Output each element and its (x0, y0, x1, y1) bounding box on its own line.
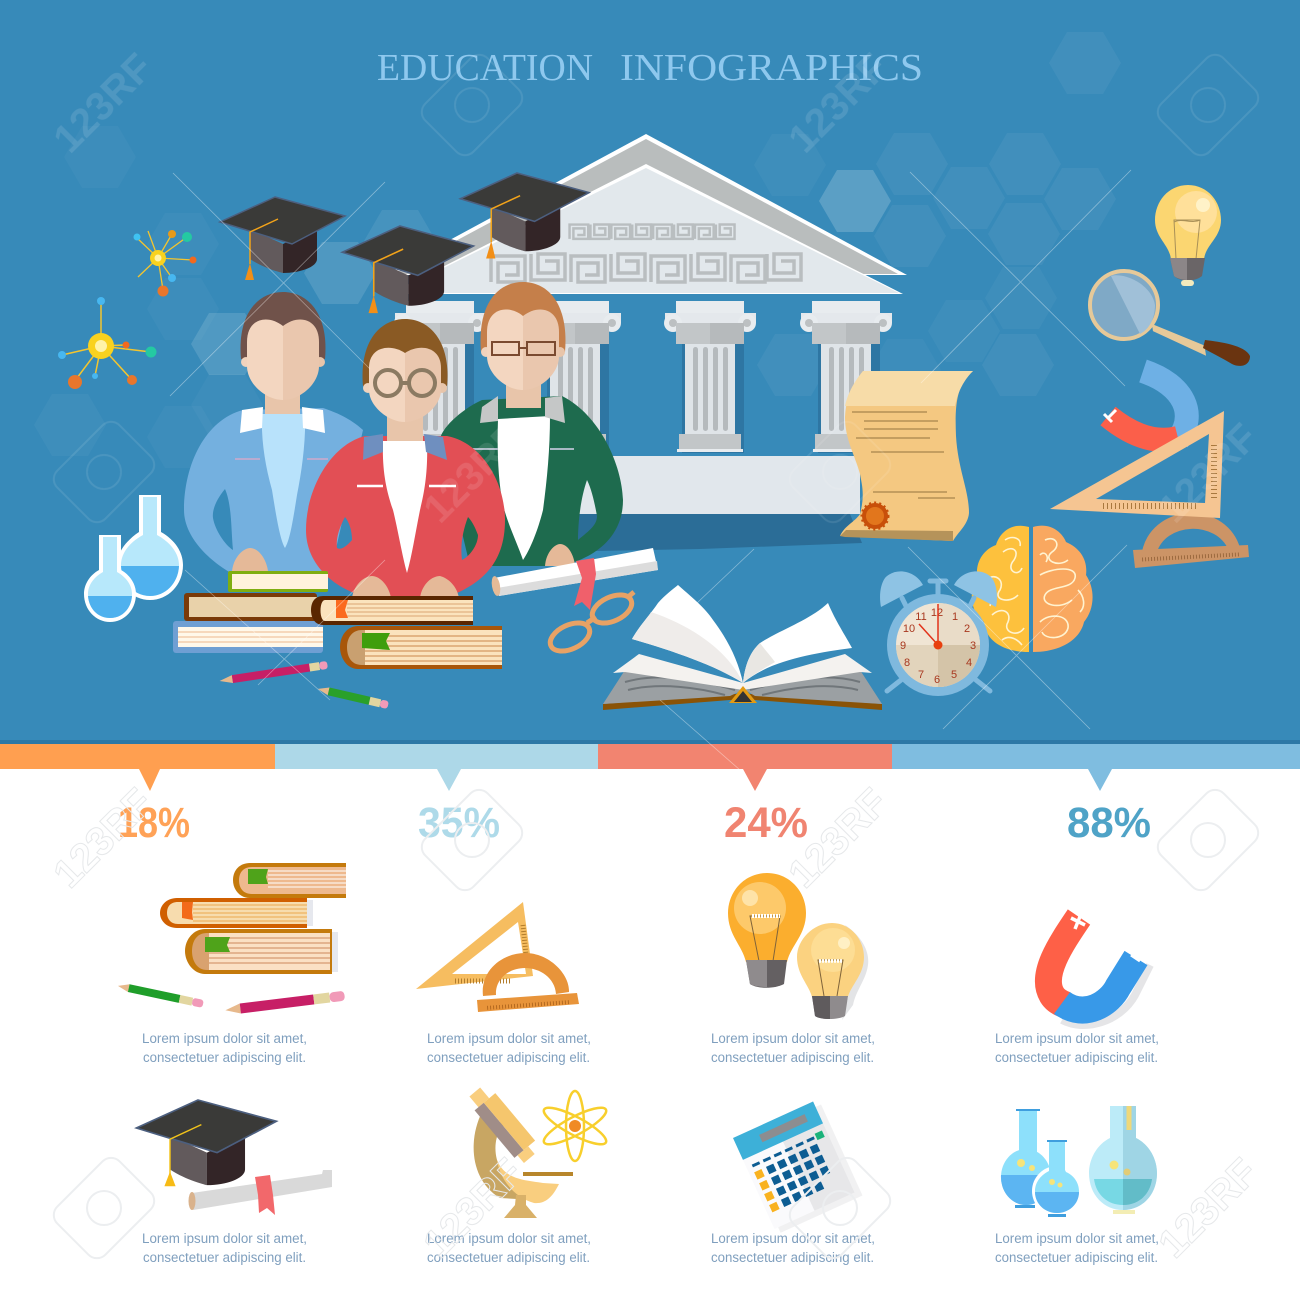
clock body (887, 594, 989, 696)
brown book (184, 593, 317, 621)
tube (466, 1082, 542, 1166)
clock numbers: 1 (952, 611, 958, 623)
base (504, 1195, 537, 1218)
collar (363, 434, 447, 460)
green book (228, 571, 328, 592)
ribbon (574, 558, 596, 610)
clock numbers: 2 (964, 623, 970, 635)
head (241, 292, 325, 400)
eighth lorem text (995, 1231, 1159, 1265)
stage (523, 1172, 573, 1176)
cap (136, 1100, 276, 1186)
jacket (440, 396, 623, 566)
second lorem text (427, 1031, 591, 1065)
collar (240, 407, 325, 433)
bells (880, 571, 997, 607)
fists (352, 576, 459, 598)
icon: large molecule (58, 297, 156, 389)
icon: small molecule (134, 230, 196, 296)
icon: parchment scroll (840, 371, 973, 541)
clock numbers: 3 (970, 640, 976, 652)
icon: calculator (733, 1099, 862, 1234)
pale blue segment and pointer (275, 744, 598, 791)
temple building (385, 134, 907, 552)
display (759, 1114, 808, 1142)
icon: flasks (84, 495, 183, 622)
pale blue book (173, 621, 323, 653)
page blocks (603, 670, 743, 704)
icon: brain (972, 526, 1093, 652)
sixth lorem text: consectetuer adipiscing elit. (427, 1250, 590, 1265)
person: left student in blue (184, 292, 363, 575)
watermark text: 123RF (45, 45, 161, 161)
neck (506, 380, 541, 408)
percentage 18%: 18% (118, 799, 190, 847)
clock numbers: 4 (966, 657, 972, 669)
neck (387, 415, 423, 443)
pediment roof (385, 134, 907, 294)
seventh lorem text: consectetuer adipiscing elit. (711, 1250, 874, 1265)
sixth lorem text (427, 1231, 591, 1265)
temple shadow (540, 514, 862, 552)
icon: book stack (117, 863, 346, 1015)
stack of books left of centre (173, 571, 502, 669)
eighth lorem text: consectetuer adipiscing elit. (995, 1250, 1158, 1265)
clock numbers: 6 (934, 674, 940, 686)
triangle ruler (1050, 411, 1224, 518)
pocket lines (357, 485, 456, 487)
title: EDUCATION (377, 47, 593, 89)
cap one (220, 197, 345, 280)
big flask (117, 495, 183, 600)
large bulb (728, 873, 806, 988)
eighth lorem text: Lorem ipsum dolor sit amet, (995, 1231, 1159, 1246)
icon: light bulb (1155, 185, 1221, 286)
icon: orange spectacles (546, 589, 636, 657)
clock numbers: 9 (900, 640, 906, 652)
big book with green bookmark (340, 626, 502, 669)
percentage 24%: 24% (724, 799, 808, 847)
clasp (729, 686, 757, 703)
first lorem text: consectetuer adipiscing elit. (143, 1050, 306, 1065)
pocket lines (473, 448, 574, 450)
seventh lorem text (711, 1231, 875, 1265)
watermark text: 123RF (415, 415, 531, 531)
watermark text: 123RF (780, 780, 896, 896)
fifth lorem text: Lorem ipsum dolor sit amet, (142, 1231, 307, 1246)
seventh lorem text: Lorem ipsum dolor sit amet, (711, 1231, 875, 1246)
columns (394, 301, 892, 453)
shirt (262, 414, 305, 548)
fourth lorem text (995, 1031, 1159, 1065)
bottom book (185, 929, 338, 974)
icon: light bulbs (728, 873, 868, 1020)
protractor (1133, 513, 1249, 568)
crossing watermark lines (170, 170, 1131, 770)
keys (752, 1136, 835, 1212)
title (377, 47, 923, 89)
hexagon background pattern (34, 32, 1121, 468)
clock numbers: 7 (918, 669, 924, 681)
watermark text: 123RF (780, 45, 896, 161)
pink pencil (225, 991, 345, 1015)
icon: horseshoe magnet (1048, 914, 1150, 1025)
orange segment and pointer (0, 744, 275, 791)
book with orange bookmark (311, 596, 473, 625)
small flask (84, 535, 136, 622)
right page (743, 603, 852, 683)
third lorem text: Lorem ipsum dolor sit amet, (711, 1031, 875, 1046)
clock numbers (900, 607, 976, 686)
watermark text: 123RF (1150, 415, 1266, 531)
person: center student in red (306, 319, 505, 598)
icon: magnifying glass (1090, 271, 1250, 366)
blue segment and pointer (892, 744, 1300, 791)
clock numbers: 12 (931, 607, 943, 619)
icon: magnet with triangle ruler (1050, 371, 1249, 568)
handle and feet (887, 581, 990, 691)
sixth lorem text: Lorem ipsum dolor sit amet, (427, 1231, 591, 1246)
collar (480, 396, 565, 423)
pocket lines (235, 458, 328, 460)
neck (265, 390, 300, 422)
second lorem text: Lorem ipsum dolor sit amet, (427, 1031, 591, 1046)
right flask (1089, 1106, 1157, 1214)
cover (603, 694, 882, 710)
blue header (733, 1102, 823, 1160)
icon: open book (603, 585, 882, 710)
icon: set square and protractor (416, 902, 579, 1012)
icon: green pencil (317, 685, 389, 709)
left flask (1001, 1109, 1051, 1208)
atom (540, 1091, 610, 1161)
shirt (383, 441, 427, 573)
cap three (460, 173, 589, 258)
coloured divider band (0, 740, 1300, 791)
arm (474, 1112, 534, 1200)
watermark text: 123RF (45, 780, 161, 896)
fourth lorem text: consectetuer adipiscing elit. (995, 1050, 1158, 1065)
salmon segment and pointer (598, 744, 892, 791)
round glasses (375, 370, 435, 396)
shirt (498, 416, 550, 560)
clock numbers: 5 (951, 669, 957, 681)
diploma (188, 1170, 332, 1215)
watermark text: 123RF (415, 1150, 531, 1266)
cap two (342, 226, 474, 313)
third lorem text: consectetuer adipiscing elit. (711, 1050, 874, 1065)
temple foundation (540, 456, 860, 514)
head (363, 319, 447, 422)
upper magnet (1108, 371, 1187, 440)
fifth lorem text (142, 1231, 307, 1265)
clock numbers: 11 (915, 611, 927, 623)
title: INFOGRAPHICS (620, 47, 923, 89)
greek key frieze (491, 225, 801, 282)
head (481, 282, 565, 390)
rectangular glasses (492, 342, 555, 355)
first lorem text (142, 1031, 307, 1065)
top book (233, 863, 346, 898)
percentage 35%: 35% (418, 799, 500, 847)
small bulb (797, 923, 868, 1020)
icon: pink pencil (219, 661, 328, 685)
fist (232, 548, 268, 571)
wax seal (862, 503, 888, 529)
clock numbers: 8 (904, 657, 910, 669)
fist (545, 544, 575, 566)
green pencil (117, 982, 204, 1008)
clock numbers: 10 (903, 623, 915, 635)
sweater (306, 436, 505, 598)
icon: row of flasks (1001, 1106, 1157, 1217)
top banner background (0, 0, 1300, 744)
clock hands (919, 604, 942, 650)
icon: microscope and atom (466, 1082, 610, 1218)
second lorem text: consectetuer adipiscing elit. (427, 1050, 590, 1065)
person: right student in green (440, 282, 623, 566)
middle flask (1032, 1140, 1082, 1217)
watermark text: 123RF (1150, 1150, 1266, 1266)
icon: alarm clock (880, 571, 997, 696)
fifth lorem text: consectetuer adipiscing elit. (143, 1250, 306, 1265)
left page (632, 585, 743, 683)
third lorem text (711, 1031, 875, 1065)
sweater (184, 408, 363, 575)
icon: rolled diploma (490, 548, 658, 610)
graduation caps (220, 173, 589, 313)
percentage 88%: 88% (1067, 799, 1151, 847)
first lorem text: Lorem ipsum dolor sit amet, (142, 1031, 307, 1046)
middle book (160, 898, 313, 928)
icon: graduation cap and scroll (136, 1100, 332, 1215)
fourth lorem text: Lorem ipsum dolor sit amet, (995, 1031, 1159, 1046)
